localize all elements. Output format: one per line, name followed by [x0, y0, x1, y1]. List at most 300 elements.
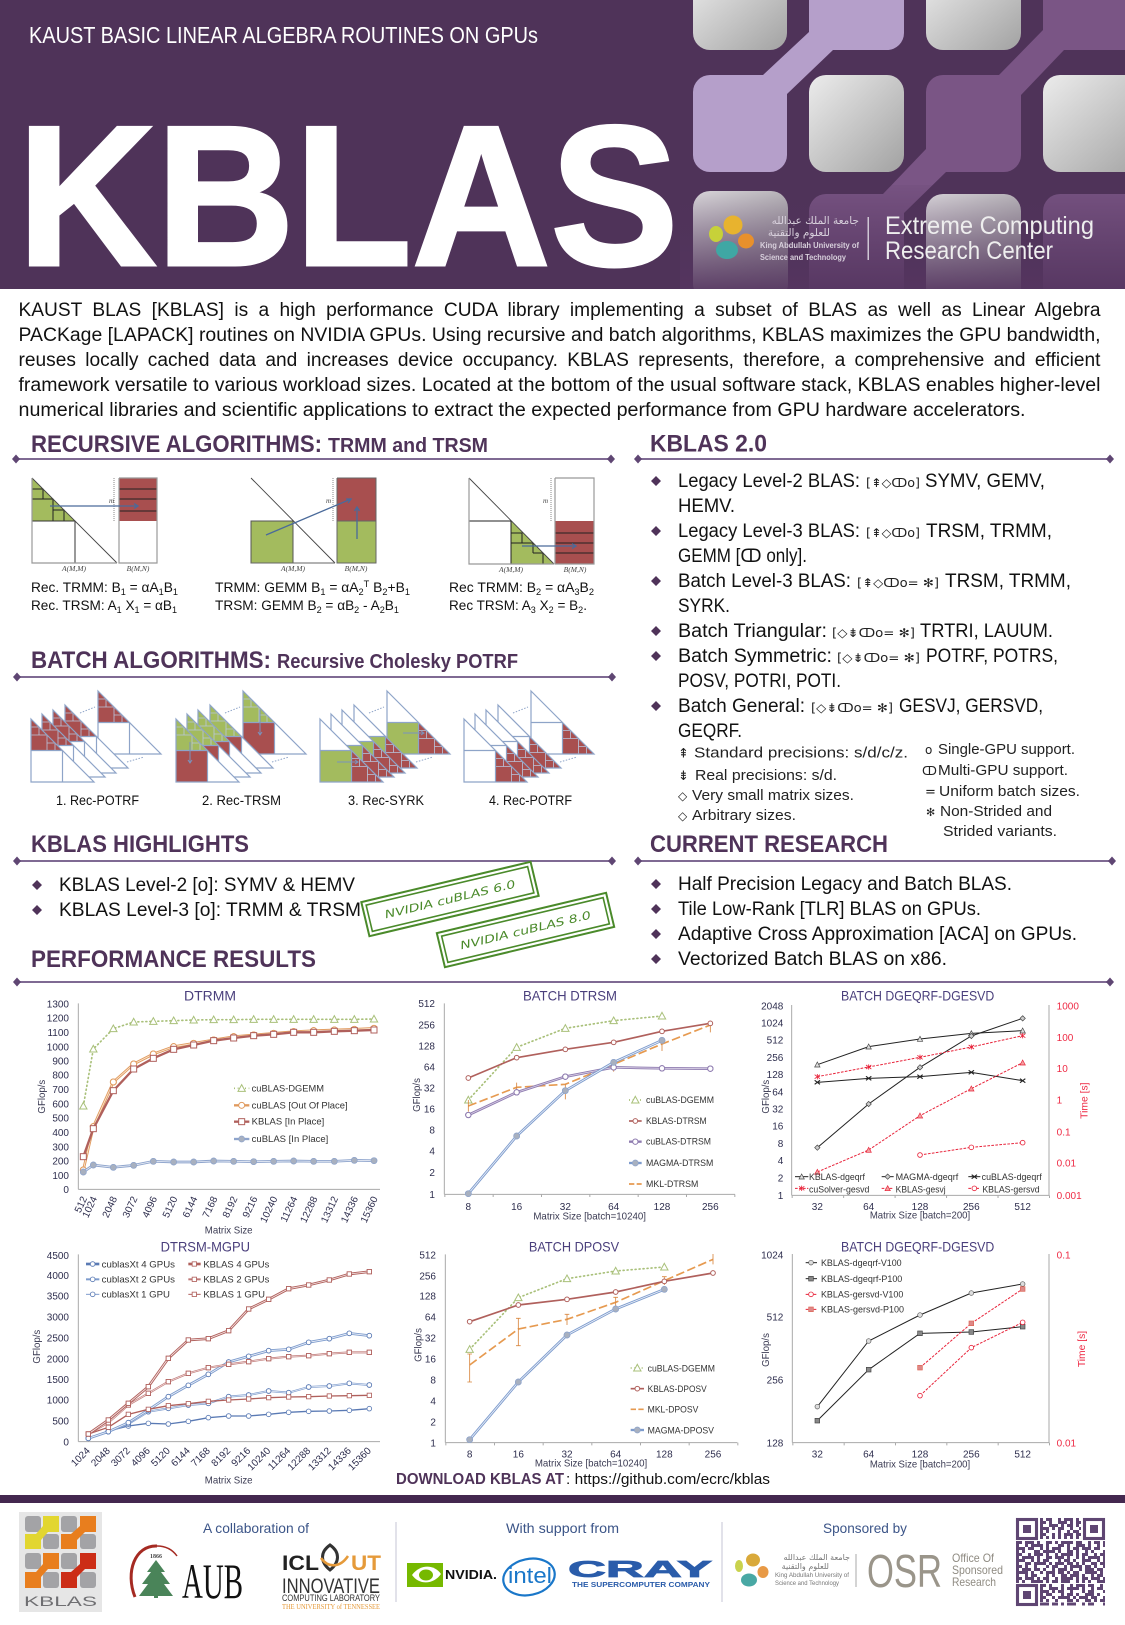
right y axis: 0.1 [1057, 1250, 1071, 1261]
x axis [444, 1194, 737, 1222]
series: KBLAS-gersvd-P100 [920, 1289, 1023, 1368]
formulas: second partition: Rec TRMM: B [449, 580, 534, 595]
intro paragraph: framework versatile to various workload sizes. Located at the bottom of the usual software stack, KBLAS enables higher-level [18, 375, 1100, 396]
y axis: 600 [52, 1099, 69, 1110]
bullet list: routines: [⇞◇ↀo] [866, 526, 920, 540]
logo: CRAY [568, 1556, 712, 1589]
legend: KBLAS 1 GPU [203, 1290, 265, 1300]
symbol legend [678, 741, 1080, 840]
x axis: 6144 [169, 1445, 193, 1469]
y axis: 2500 [47, 1333, 69, 1344]
formulas: GEMM update: B [369, 580, 382, 595]
KAUST logo: King Abdullah University of [760, 241, 859, 250]
bullet list: routines: [◇⇟ↀo= ✻] [832, 626, 915, 640]
y axis: 500 [52, 1416, 69, 1427]
y axis: 1000 [47, 1396, 69, 1407]
intro paragraph: reuses locally cached data and increases device occupancy. KBLAS represents, therefore, a comprehensive and efficient [18, 350, 1101, 371]
section heading: performance results: PERFORMANCE RESULTS [31, 946, 316, 973]
legend: KBLAS-DPOSV [648, 1384, 707, 1394]
bullet list: routines: [⇞◇ↀo] [866, 476, 920, 490]
x axis: 128 [912, 1450, 929, 1461]
diagram: GEMM update: A(M,M) [280, 564, 305, 573]
logo: NVIDIA [407, 1563, 497, 1587]
subheading: recursive Cholesky POTRF: Recursive Cholesky POTRF [277, 651, 518, 673]
series: KBLAS-dgeqrf [817, 1031, 1023, 1065]
series: MAGMA-DTRSM [468, 1040, 662, 1194]
formulas: first partition: = αB [140, 598, 172, 613]
logo: Office of Sponsored Research: Sponsored [952, 1563, 1003, 1577]
y axis: 200 [52, 1157, 69, 1168]
y axis: 1200 [47, 1014, 69, 1025]
x axis: 256 [963, 1450, 980, 1461]
x axis: 9216 [230, 1445, 253, 1469]
x axis: 12288 [299, 1195, 321, 1225]
bullet list: research topics: Adaptive Cross Approximation [ACA] on GPUs. [678, 924, 1077, 945]
series: cublasXt 2 GPUs [88, 1383, 369, 1438]
bullet list: routines: TRSM, TRMM, [945, 571, 1071, 592]
KAUST logo: للعلوم والتقنية [768, 227, 830, 239]
formulas: GEMM update: 1 [394, 605, 399, 615]
legend: MAGMA-DTRSM [646, 1158, 713, 1168]
bullet list: routines: Batch Symmetric: [678, 646, 832, 667]
formulas: second partition: 3 [531, 605, 536, 615]
x axis [73, 1189, 381, 1236]
right y axis: 100 [1057, 1033, 1074, 1044]
formulas: second partition: 2 [589, 587, 594, 597]
section: current research [634, 831, 1116, 970]
y axis: 16 [424, 1105, 435, 1116]
diagram: second partition: B(M,N) [564, 565, 587, 574]
diagram: first partition: m [109, 497, 114, 505]
series: KBLAS 1 GPU [88, 1395, 369, 1434]
diagram: step 4 Rec-POTRF [464, 691, 594, 782]
footer label: sponsors: Sponsored by [823, 1520, 907, 1536]
legend: KBLAS-gersvd-V100 [821, 1290, 903, 1300]
series: cuBLAS-DGEMM [470, 1267, 664, 1349]
logo: CRAY: THE SUPERCOMPUTER COMPANY [572, 1580, 710, 1589]
x axis: 128 [654, 1202, 671, 1213]
x axis: Matrix Size [batch=200] [870, 1211, 970, 1222]
formulas: first partition [31, 580, 178, 615]
legend: MKL-DPOSV [648, 1405, 698, 1415]
y axis: 0 [63, 1185, 69, 1196]
x axis: 11264 [266, 1445, 293, 1473]
right y axis: Time [s] [1077, 1331, 1088, 1367]
section: KBLAS highlights [13, 831, 616, 967]
diagram: second partition: m [543, 497, 548, 505]
series: cuBLAS in place [83, 1160, 374, 1172]
left y axis: 256 [767, 1053, 784, 1064]
legend: KBLAS-gersvd-P100 [821, 1305, 904, 1315]
right y axis: 10 [1057, 1064, 1068, 1075]
series: KBLAS-dgeqrf-V100 [817, 1284, 1023, 1407]
formulas: first partition: 1 [173, 587, 178, 597]
formulas: GEMM update: 2 [317, 605, 322, 615]
formulas: GEMM update: - A [359, 598, 380, 613]
bullet list: routines: Batch General: [678, 696, 805, 717]
logo: Office of Sponsored Research: OSR [867, 1545, 942, 1597]
chart title: DTRSM-MGPU [161, 1238, 250, 1254]
formulas: first partition: B [164, 580, 173, 595]
logo: ICL UT Innovative Computing Laboratory: INNOVATIVE [282, 1575, 380, 1598]
y axis: 4000 [47, 1271, 69, 1282]
y axis: GFlop/s [37, 1080, 48, 1114]
y axis: 1 [429, 1190, 435, 1201]
y axis: 1100 [48, 1028, 69, 1039]
y axis: 4 [430, 1396, 436, 1407]
formulas: first partition: 1 [135, 605, 140, 615]
x axis: 15360 [346, 1445, 374, 1473]
heading: batch algorithms: BATCH ALGORITHMS: [31, 647, 271, 674]
legend: KBLAS-gersvd [982, 1184, 1040, 1194]
left y axis [761, 1001, 792, 1202]
legend: cuBLAS-dgeqrf [982, 1172, 1042, 1182]
formulas: second partition: Rec TRSM: A [449, 598, 531, 613]
heading: KBLAS 2.0: KBLAS 2.0 [650, 430, 767, 458]
logo: CRAY: CRAY [568, 1556, 712, 1582]
legend: cuBLAS-DTRSM [646, 1137, 711, 1147]
series: MKL-DPOSV with error bars [467, 1254, 713, 1382]
left y axis: GFlop/s [761, 1333, 772, 1367]
y axis: 0 [63, 1437, 69, 1448]
bullet list: routines: Legacy Level-3 BLAS: [678, 521, 860, 542]
legend: cuBLAS-DGEMM [648, 1363, 715, 1373]
formulas: second partition: B [580, 580, 589, 595]
QR code [1016, 1520, 1105, 1604]
stamp: NVIDIA cuBLAS 6.0: NVIDIA cuBLAS 6.0 [383, 878, 517, 921]
x axis: Matrix Size [batch=10240] [535, 1459, 647, 1470]
x axis: 8 [467, 1450, 473, 1461]
x axis: 3072 [121, 1195, 141, 1220]
symbol legend: Single-GPU support. [938, 741, 1075, 758]
Extreme Computing Research Center wordmark: Extreme Computing [885, 212, 1094, 240]
y axis: 8 [430, 1375, 436, 1386]
left y axis: 8 [778, 1139, 784, 1150]
y axis: 8 [429, 1126, 435, 1137]
y axis: GFlop/s [32, 1330, 43, 1364]
symbol legend: Multi-GPU support. [938, 762, 1068, 779]
left y axis: 512 [767, 1313, 784, 1324]
y axis: 800 [52, 1071, 69, 1082]
formulas: second partition: 2 [536, 587, 541, 597]
series: KBLAS-DTRSM [468, 1023, 710, 1078]
bullet list: routines: GEQRF. [678, 721, 742, 742]
left y axis: GFlop/s [761, 1080, 772, 1114]
diagram: step 1 Rec-POTRF [31, 691, 161, 782]
series: cuBLAS-DTRSM [468, 1067, 710, 1115]
main title KBLAS: KBLAS [18, 85, 678, 308]
legend: cublasXt 1 GPU [102, 1290, 170, 1300]
symbol legend: Standard precisions: s/d/c/z. [694, 744, 908, 762]
y axis: 2 [430, 1417, 436, 1428]
formulas: second partition: 3 [574, 587, 580, 597]
formulas: GEMM update: 2 [354, 605, 359, 615]
download link [396, 1471, 770, 1488]
formulas: GEMM update: 2 [380, 605, 385, 615]
legend [629, 1095, 714, 1189]
y axis: 256 [419, 1272, 436, 1283]
diagram: step 3 Rec-SYRK [320, 691, 450, 782]
x axis: 14336 [326, 1445, 354, 1473]
left y axis: 512 [767, 1036, 784, 1047]
right y axis: 0.01 [1057, 1159, 1077, 1170]
x axis: 10240 [246, 1445, 273, 1473]
x axis: 7168 [189, 1445, 213, 1469]
chart: BATCH DGEQRF-DGESVD (time and Gflop) [761, 988, 1090, 1222]
x axis: 16 [511, 1202, 523, 1213]
heading: KBLAS highlights: KBLAS HIGHLIGHTS [31, 831, 249, 858]
bullet list: routines: [◇⇟ↀo= ✻] [811, 701, 893, 715]
y axis: 500 [52, 1114, 69, 1125]
symbol legend: Uniform batch sizes. [939, 783, 1080, 800]
y axis [413, 1251, 445, 1449]
legend: KBLAS 4 GPUs [203, 1259, 270, 1269]
y axis: 1500 [47, 1375, 69, 1386]
y axis: 4500 [47, 1251, 69, 1262]
x axis: 512 [1014, 1450, 1031, 1461]
symbol legend: ↀ [922, 764, 937, 778]
right y axis [1049, 1001, 1090, 1202]
x axis: 5120 [149, 1445, 173, 1469]
chart title: BATCH DGEQRF-DGESVD [841, 988, 994, 1004]
legend [234, 1083, 348, 1144]
stamp: NVIDIA cuBLAS 8.0: NVIDIA cuBLAS 8.0 [459, 909, 592, 952]
logo: ICL UT Innovative Computing Laboratory [282, 1545, 381, 1611]
x axis: 16 [513, 1450, 524, 1461]
bullet list: routines: TRTRI, LAUUM. [920, 621, 1053, 642]
right y axis [1049, 1250, 1088, 1449]
y axis: 2 [429, 1168, 435, 1179]
y axis: 4 [429, 1147, 435, 1158]
x axis: 64 [863, 1202, 875, 1213]
formulas: GEMM update: T [364, 579, 370, 589]
left y axis: 1024 [761, 1250, 784, 1261]
bullet list: highlights: KBLAS Level-3 [o]: TRMM & TRSM [59, 900, 361, 921]
series: KBLAS-gesvj [817, 1063, 1023, 1172]
legend: cuBLAS [In Place] [252, 1134, 328, 1144]
logo: NVIDIA: NVIDIA. [445, 1567, 497, 1582]
x axis: 512 [73, 1195, 90, 1215]
legend: cuBLAS [Out Of Place] [252, 1100, 348, 1110]
y axis: 100 [52, 1171, 69, 1182]
bullet list: research topics: Half Precision Legacy and Batch BLAS. [678, 874, 1012, 895]
diagram: GEMM update: B(M,N) [345, 564, 368, 573]
bullet list: routines: Batch Level-3 BLAS: [678, 571, 851, 592]
bullet list: routines: POTRF, POTRS, [926, 646, 1058, 667]
bullet list: routines: TRSM, TRMM, [926, 521, 1052, 542]
formulas: first partition: 1 [117, 605, 122, 615]
series: KBLAS-gersvd [920, 1143, 1023, 1155]
right y axis: 1 [1057, 1096, 1063, 1107]
formulas: second partition: = αA [541, 580, 574, 595]
logo: ICL UT Innovative Computing Laboratory: THE UNIVERSITY of TENNESSEE [282, 1603, 380, 1611]
x axis [69, 1442, 380, 1486]
chart title: BATCH DGEQRF-DGESVD [841, 1238, 994, 1254]
left y axis: 16 [772, 1121, 784, 1132]
logo: intel [500, 1554, 558, 1600]
bullet list: highlights: KBLAS Level-2 [o]: SYMV & HEMV [59, 875, 355, 896]
legend: cublasXt 2 GPUs [102, 1275, 175, 1285]
diagram: GEMM update: m [326, 497, 331, 505]
step captions: 3. Rec-SYRK [348, 793, 424, 808]
logo: KAUST: King Abdullah University of [775, 1573, 849, 1579]
right y axis: 0.1 [1057, 1127, 1071, 1138]
stamp: NVIDIA cuBLAS 6.0 [361, 862, 539, 936]
stamp: NVIDIA cuBLAS 8.0 [437, 893, 614, 967]
intro paragraph [18, 300, 1101, 421]
symbol legend: ◇ [678, 809, 688, 823]
formulas: second partition [449, 580, 594, 615]
legend: KBLAS-dgeqrf-P100 [821, 1274, 902, 1284]
x axis: 12288 [286, 1445, 313, 1473]
x axis: 32 [561, 1450, 573, 1461]
left y axis: 1 [778, 1191, 784, 1202]
legend: KBLAS-dgeqrf [809, 1172, 865, 1182]
x axis: 8192 [210, 1445, 233, 1469]
formulas: GEMM update: TRMM: GEMM B [215, 580, 318, 595]
heading: recursive algorithms: RECURSIVE ALGORITHMS: [31, 431, 322, 458]
formulas: GEMM update: 1 [405, 587, 410, 597]
x axis [792, 1443, 1050, 1471]
logo: AUB: 1866 [150, 1554, 162, 1560]
y axis: 512 [419, 1251, 436, 1262]
y axis [32, 1251, 78, 1448]
y axis: 16 [425, 1354, 436, 1365]
y axis: 1300 [47, 999, 69, 1010]
left y axis: 4 [778, 1156, 784, 1167]
download link: : https://github.com/ecrc/kblas [566, 1471, 770, 1488]
left y axis: 128 [767, 1070, 784, 1081]
bullet list: routines: SYMV, GEMV, [925, 471, 1045, 492]
y axis: 64 [425, 1312, 436, 1323]
bullet list: routines: [◇⇟ↀo= ✻] [837, 651, 920, 665]
legend [631, 1363, 715, 1435]
diagram: first partition: A(M,M) [61, 564, 86, 573]
formulas: GEMM update: = αB [322, 598, 354, 613]
symbol legend: ⇟ [678, 769, 689, 784]
symbol legend: ⇞ [678, 746, 689, 762]
bullet list: research topics [651, 874, 1077, 970]
x axis [792, 1195, 1050, 1222]
right y axis: 0.01 [1057, 1438, 1077, 1449]
bullet list: highlights [32, 875, 361, 921]
step captions: 4. Rec-POTRF [489, 793, 572, 808]
symbol legend: Real precisions: s/d. [695, 767, 837, 784]
left y axis: 64 [772, 1087, 784, 1098]
left y axis: 2048 [761, 1001, 784, 1012]
x axis [445, 1443, 739, 1470]
bullet list: routines: HEMV. [678, 496, 735, 517]
footer label: support: With support from [506, 1520, 619, 1536]
legend [86, 1259, 270, 1300]
x axis: 256 [702, 1202, 719, 1213]
legend: cuBLAS-DGEMM [252, 1083, 324, 1093]
x axis: 13312 [319, 1195, 341, 1225]
x axis: 4096 [129, 1445, 153, 1469]
formulas: GEMM update: TRSM: GEMM B [215, 598, 316, 613]
legend [806, 1258, 904, 1315]
legend: KBLAS-dgeqrf-V100 [821, 1258, 902, 1268]
formulas: first partition: Rec. TRMM: B [31, 580, 119, 595]
formulas: first partition: 1 [159, 587, 164, 597]
step captions: 1. Rec-POTRF [56, 793, 139, 808]
y axis: 1000 [47, 1042, 69, 1053]
chart title: BATCH DTRSM [523, 988, 617, 1004]
diagram: GEMM update [251, 478, 376, 573]
x axis: 128 [656, 1450, 673, 1461]
y axis: 512 [418, 999, 435, 1010]
formulas: second partition: 2 [549, 605, 554, 615]
y axis: 3500 [47, 1292, 69, 1303]
legend: MKL-DTRSM [646, 1179, 698, 1189]
intro paragraph: PACKage [LAPACK] routines on NVIDIA GPUs. Using recursive and batch algorithms, KBLAS maximizes the GPU bandwidth, [18, 325, 1100, 346]
legend: KBLAS [In Place] [252, 1117, 324, 1127]
formulas: first partition: X [122, 598, 135, 613]
formulas: second partition: 2 [578, 605, 583, 615]
series: cuBLAS out of place [83, 1028, 374, 1170]
diagram: second partition: A(M,M) [498, 565, 523, 574]
series: KBLAS-gersvd-V100 [920, 1322, 1023, 1396]
bullet list: routines: POSV, POTRI, POTI. [678, 671, 841, 692]
KAUST logo: Science and Technology [760, 253, 846, 262]
header subtitle: KAUST BASIC LINEAR ALGEBRA ROUTINES ON GPUs [29, 22, 538, 48]
y axis: 64 [424, 1062, 435, 1073]
diagram: second partition [469, 478, 594, 574]
y axis [412, 999, 444, 1201]
symbol legend: ✻ [926, 806, 935, 819]
section: recursive algorithms [12, 431, 615, 615]
KAUST logo [709, 215, 859, 262]
x axis: 32 [560, 1202, 571, 1213]
intro paragraph: numerical libraries and scientific applications to extract the expected performance from GPU hardware accelerators. [18, 400, 1026, 421]
left y axis: 32 [772, 1104, 784, 1115]
chart: BATCH DPOSV [413, 1238, 739, 1470]
legend: MAGMA-dgeqrf [896, 1172, 959, 1182]
logo: KAUST: Science and Technology [775, 1581, 839, 1587]
formulas: second partition: . [583, 598, 587, 613]
logo: intel: intel [508, 1563, 552, 1588]
y axis: 2000 [47, 1354, 69, 1365]
x axis: 1024 [81, 1195, 100, 1220]
Extreme Computing Research Center wordmark [868, 212, 1094, 265]
formulas: GEMM update: 2 [382, 587, 388, 597]
x axis: 9216 [241, 1195, 261, 1220]
y axis: 32 [424, 1083, 435, 1094]
symbol legend: = [925, 785, 936, 800]
bullet list: routines: SYRK. [678, 596, 730, 617]
formulas: second partition: X [536, 598, 549, 613]
y axis: 3000 [47, 1312, 69, 1323]
series: MAGMA-dgeqrf [817, 1018, 1023, 1148]
series: cublasXt 4 GPUs [88, 1333, 369, 1438]
x axis: 5120 [161, 1195, 181, 1220]
logo: AUB: AUB [182, 1553, 243, 1609]
KAUST logo: جامعة الملك عبدالله [772, 215, 859, 227]
bullet list: routines: GESVJ, GERSVD, [899, 696, 1043, 717]
legend: KBLAS-gesvj [896, 1184, 946, 1194]
formulas: GEMM update [215, 579, 410, 615]
x axis: 64 [610, 1450, 622, 1461]
x axis: 10240 [259, 1195, 281, 1225]
x axis: 64 [608, 1202, 620, 1213]
series: cuBLAS-DGEMM [468, 1016, 662, 1100]
x axis: 32 [812, 1202, 823, 1213]
formulas: GEMM update: +B [388, 580, 405, 595]
bullet list: routines: GEMM [ↀ only]. [678, 546, 807, 567]
x axis: Matrix Size [batch=200] [870, 1460, 970, 1471]
series: MKL-DTRSM with error bars [468, 1025, 710, 1112]
chart: DTRMM [37, 988, 381, 1236]
